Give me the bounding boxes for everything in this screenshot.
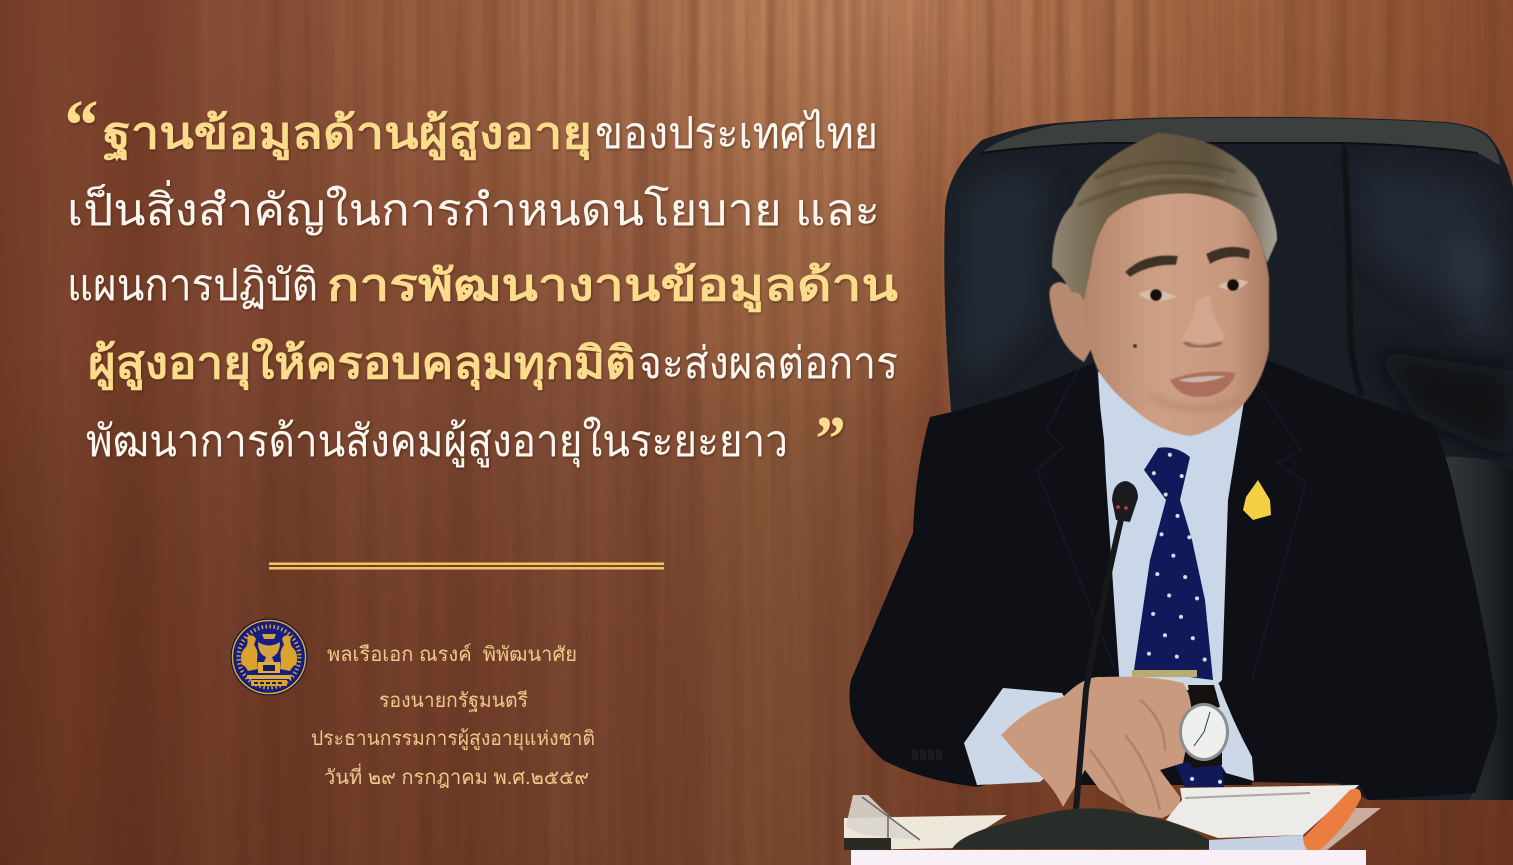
- microphone: [952, 481, 1209, 849]
- attribution text: [311, 643, 595, 789]
- line 3: การพัฒนางานข้อมูลด้าน: [327, 261, 898, 312]
- tie clip: [1132, 670, 1197, 677]
- wristwatch: [1179, 685, 1229, 768]
- ear: [1049, 282, 1096, 362]
- hands: [1001, 677, 1191, 818]
- necktie: [1132, 447, 1224, 787]
- chair top roll: [982, 118, 1500, 165]
- name: พลเรือเอก ณรงค์ พิพัฒนาศัย: [327, 643, 577, 666]
- opening quotation mark: “: [61, 85, 97, 165]
- lapel pin: [1243, 480, 1271, 520]
- line 4: จะส่งผลต่อการ: [638, 339, 898, 388]
- line 1: ของประเทศไทย: [595, 108, 878, 158]
- right eyebrow: [1206, 247, 1250, 264]
- suit jacket: [850, 360, 1497, 800]
- right eye: [1218, 280, 1248, 290]
- line 5: พัฒนาการด้านสังคมผู้สูงอายุในระยะยาว: [86, 416, 788, 468]
- line 3: แผนการปฏิบัติ: [67, 261, 318, 310]
- icon: government seal: [230, 618, 308, 696]
- left eye: [1138, 290, 1176, 301]
- photo: seated official: [844, 117, 1513, 865]
- chair cushion highlights: [960, 174, 1045, 370]
- face: [1082, 193, 1269, 436]
- line 3: [67, 261, 898, 312]
- line 1: [103, 108, 878, 161]
- nose: [1180, 295, 1225, 348]
- chairman role: ประธานกรรมการผู้สูงอายุแห่งชาติ: [311, 728, 595, 751]
- date: วันที่ ๒๙ กรกฎาคม พ.ศ.๒๕๕๙: [324, 763, 589, 789]
- clear sheet: [1300, 808, 1381, 850]
- shirt: [1098, 372, 1245, 690]
- hair: [1052, 133, 1277, 300]
- neck and head: [1049, 133, 1277, 436]
- gold double divider: [269, 562, 664, 570]
- closing quotation mark: ”: [812, 403, 844, 474]
- sleeve buttons: [912, 750, 942, 760]
- documents on desk: [1166, 785, 1381, 850]
- line 2: เป็นสิ่งสำคัญในการกำหนดนโยบาย และ: [67, 179, 880, 235]
- mole: [1133, 344, 1137, 348]
- mouth: [1170, 372, 1236, 397]
- line 1: ฐานข้อมูลด้านผู้สูงอายุ: [103, 109, 592, 161]
- desk items and glasses: [844, 795, 1007, 850]
- line 4: ผู้สูงอายุให้ครอบคลุมทุกมิติ: [88, 337, 636, 391]
- left eyebrow: [1125, 255, 1178, 277]
- quote text block: [61, 85, 898, 474]
- office chair: [944, 117, 1513, 800]
- chair arm strip: [1440, 457, 1513, 800]
- position: รองนายกรัฐมนตรี: [379, 690, 528, 712]
- orange binder: [1303, 789, 1361, 851]
- white desk plate: [851, 850, 1366, 865]
- line 4: [88, 337, 898, 391]
- shirt cuff: [964, 688, 1090, 785]
